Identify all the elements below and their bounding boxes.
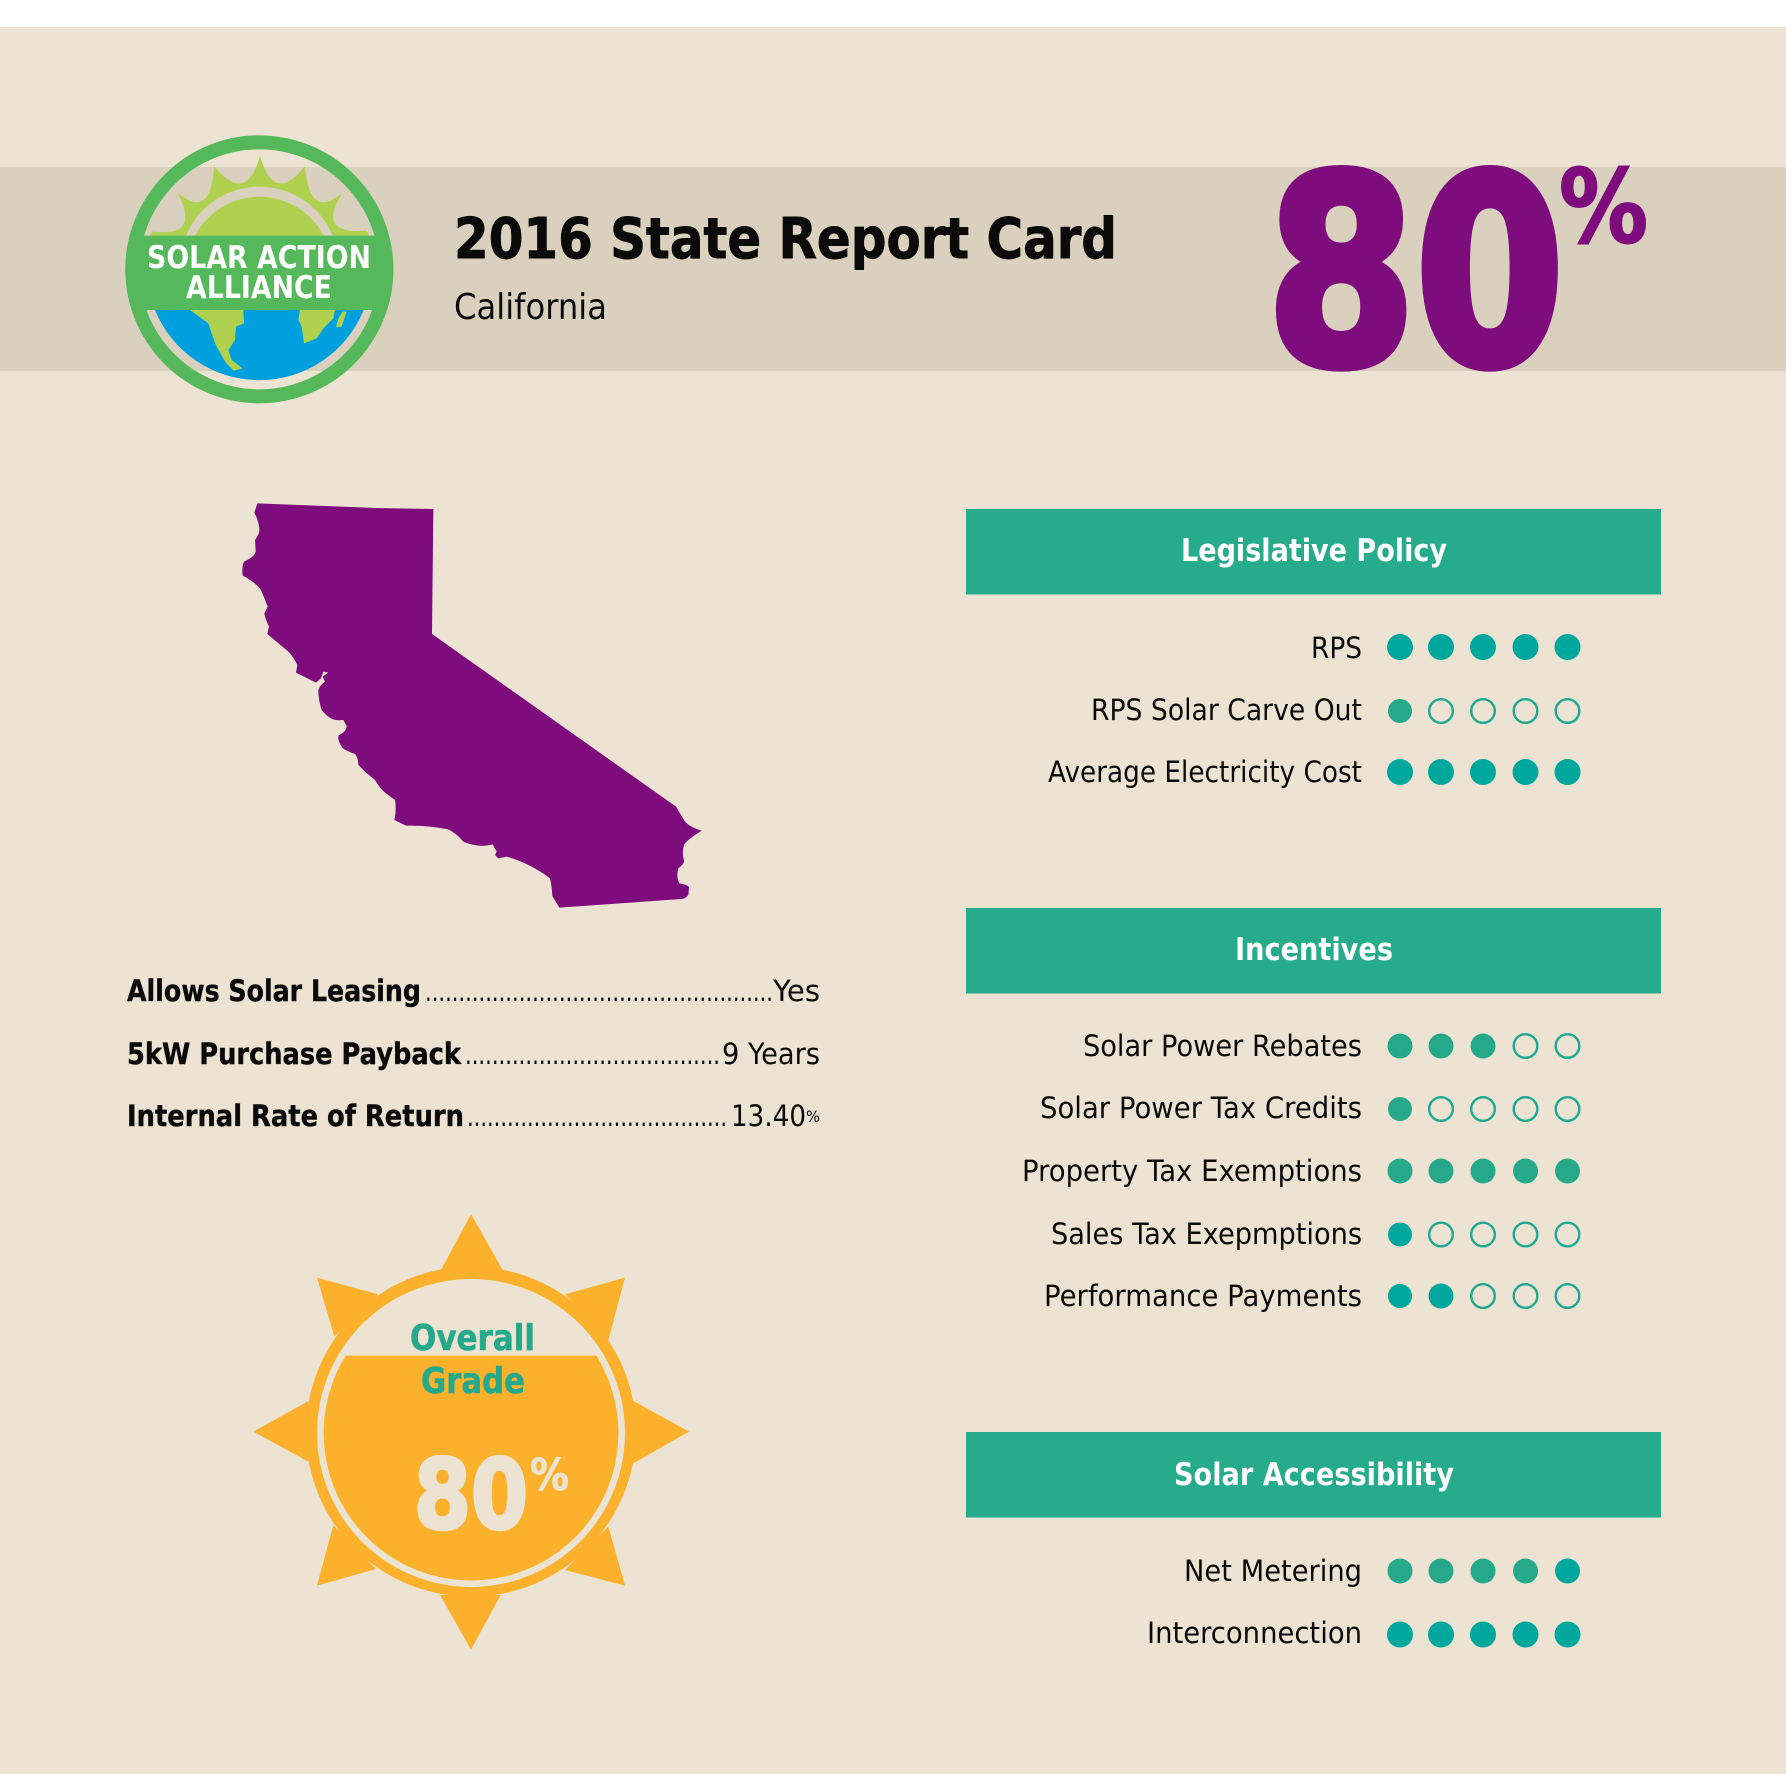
row: interconnection: Interconnection xyxy=(1147,1616,1362,1650)
grade value: 80 xyxy=(414,1439,528,1551)
grade label xyxy=(410,1318,535,1402)
heading: solar accessibility xyxy=(966,1432,1661,1518)
row: net metering: Net Metering xyxy=(1184,1554,1362,1588)
row: property tax exemptions: Property Tax Exemptions xyxy=(1022,1154,1362,1188)
fact: internal rate of return xyxy=(127,1099,820,1133)
fact: solar leasing xyxy=(127,974,820,1008)
row: solar power rebates: Solar Power Rebates xyxy=(1083,1029,1362,1063)
map of California xyxy=(242,503,702,908)
row: RPS solar carve out xyxy=(1091,693,1579,727)
row: sales tax exemptions: Sales Tax Exepmptions xyxy=(1051,1217,1362,1251)
row: solar power tax credits: Solar Power Tax Credits xyxy=(1040,1091,1362,1125)
grade label: Overall xyxy=(410,1318,535,1359)
headline score: % xyxy=(1559,148,1648,267)
logo wordmark: ALLIANCE xyxy=(186,270,332,306)
panel: solar accessibility xyxy=(966,1432,1661,1650)
fact: payback: 5kW Purchase Payback xyxy=(127,1037,462,1071)
row: property tax exemptions xyxy=(1022,1154,1580,1188)
fact: internal rate of return: ....................................... xyxy=(467,1100,727,1133)
panel: incentives xyxy=(966,908,1661,1313)
row: RPS solar carve out: RPS Solar Carve Out xyxy=(1091,693,1362,727)
overall grade sun badge xyxy=(253,1214,689,1650)
logo wordmark xyxy=(147,240,371,306)
heading: legislative policy xyxy=(966,509,1661,594)
fact: payback: 9 Years xyxy=(722,1037,820,1071)
row: average electricity cost xyxy=(1048,755,1580,789)
grade label: Grade xyxy=(421,1361,525,1402)
fact: payback: ...................................... xyxy=(465,1038,720,1071)
subtitle: state name: California xyxy=(454,287,607,328)
header band xyxy=(0,167,1786,371)
row: RPS xyxy=(1311,631,1580,665)
fact: payback xyxy=(127,1037,820,1071)
fact: solar leasing: .................................................... xyxy=(425,975,773,1008)
title: 2016 State Report Card xyxy=(454,207,1117,272)
row: solar power tax credits xyxy=(1040,1091,1579,1125)
heading: legislative policy: Legislative Policy xyxy=(1181,533,1447,569)
fact: internal rate of return: Internal Rate of Return xyxy=(127,1099,464,1133)
fact: internal rate of return: % xyxy=(806,1107,820,1126)
panel: legislative policy xyxy=(966,509,1661,789)
row: net metering xyxy=(1184,1554,1580,1588)
fact: solar leasing: Allows Solar Leasing xyxy=(127,974,421,1008)
row: RPS: RPS xyxy=(1311,631,1362,665)
row: average electricity cost: Average Electricity Cost xyxy=(1048,755,1362,789)
row: performance payments: Performance Payments xyxy=(1044,1279,1362,1313)
grade value: % xyxy=(530,1450,569,1501)
heading: incentives: Incentives xyxy=(1235,932,1393,968)
row: performance payments xyxy=(1044,1279,1579,1313)
logo: Solar Action Alliance xyxy=(123,142,397,396)
heading: incentives xyxy=(966,908,1661,994)
fact: internal rate of return: 13.40 xyxy=(731,1099,806,1133)
row: sales tax exemptions xyxy=(1051,1217,1579,1251)
headline score: 80 xyxy=(1267,123,1564,425)
logo wordmark: SOLAR ACTION xyxy=(147,240,371,276)
row: interconnection xyxy=(1147,1616,1580,1650)
key facts list xyxy=(127,974,820,1133)
row: solar power rebates xyxy=(1083,1029,1579,1063)
fact: solar leasing: Yes xyxy=(772,974,820,1008)
heading: solar accessibility: Solar Accessibility xyxy=(1174,1457,1454,1493)
